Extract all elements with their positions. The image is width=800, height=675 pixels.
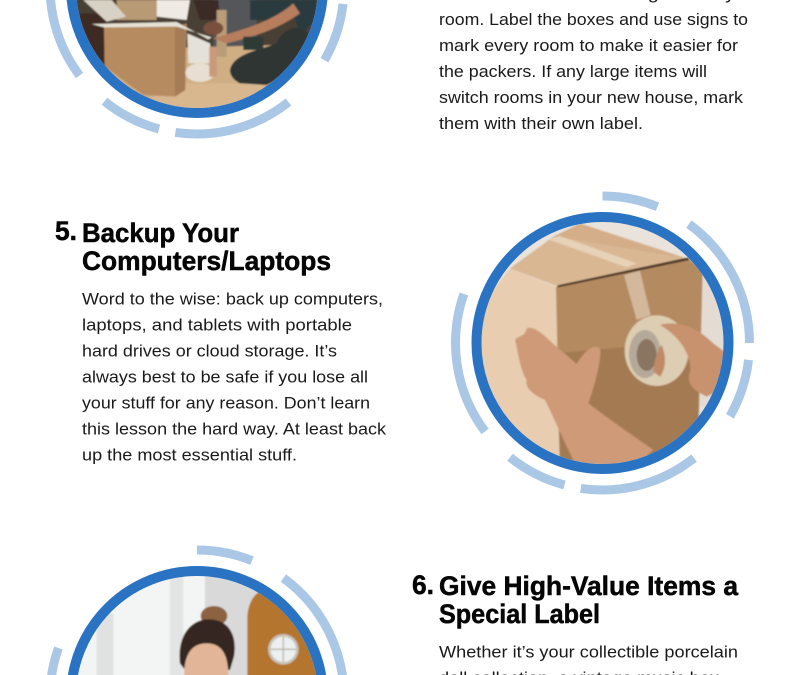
- ring: blue frame around middle photo: [476, 217, 728, 469]
- photo: family unpacking a cardboard box: [76, 0, 318, 108]
- text block: end of step 4: room. Label the boxes and use signs to: [439, 10, 748, 29]
- heading: step 5: [55, 216, 331, 276]
- text block: step 5 body: laptops, and tablets with portable: [82, 316, 352, 334]
- left hand and arm: [515, 328, 653, 467]
- heading: step 6: Give High-Value Items a: [439, 571, 739, 601]
- text block: step 5 body: Word to the wise: back up computers,: [82, 290, 383, 308]
- text block: end of step 4: switch rooms in your new house, mark: [439, 88, 744, 107]
- ring: blue frame around bottom photo: [71, 571, 323, 675]
- heading: step 5: 5.: [55, 216, 77, 246]
- text block: step 5 body: [82, 290, 387, 464]
- ring: blue frame around top photo: [71, 0, 323, 113]
- decorative arcs around bottom photo: [50, 550, 344, 675]
- heading: step 6: Special Label: [439, 599, 600, 629]
- text block: step 6 body: [439, 642, 738, 675]
- text block: step 5 body: hard drives or cloud storage. It’s: [82, 342, 337, 360]
- text block: end of step 4: [439, 0, 748, 133]
- text block: end of step 4: them with their own label.: [439, 114, 643, 133]
- text block: end of step 4: the packers. If any large items will: [439, 62, 707, 81]
- text block: step 6 body: Whether it’s your collectible porcelain: [439, 642, 738, 662]
- text block: step 5 body: always best to be safe if you lose all: [82, 368, 368, 386]
- decorative arcs around top photo: [50, 0, 344, 134]
- text block: step 5 body: up the most essential stuff.: [82, 446, 297, 464]
- photo: woman with door behind her: [78, 576, 316, 675]
- text block: end of step 4: mark every room to make it easier for: [439, 36, 738, 55]
- heading: step 6: 6.: [412, 570, 434, 600]
- heading: step 5: Backup Your: [82, 218, 239, 248]
- text block: step 5 body: your stuff for any reason. Don’t learn: [82, 394, 370, 412]
- photo: hands taping a cardboard box: [482, 222, 724, 464]
- right hand: [660, 323, 727, 397]
- heading: step 5: Computers/Laptops: [82, 246, 331, 276]
- tape roll: [625, 315, 689, 386]
- text block: step 5 body: this lesson the hard way. At least back: [82, 420, 387, 438]
- heading: step 6: [412, 570, 739, 629]
- decorative arcs around middle photo: [456, 196, 750, 490]
